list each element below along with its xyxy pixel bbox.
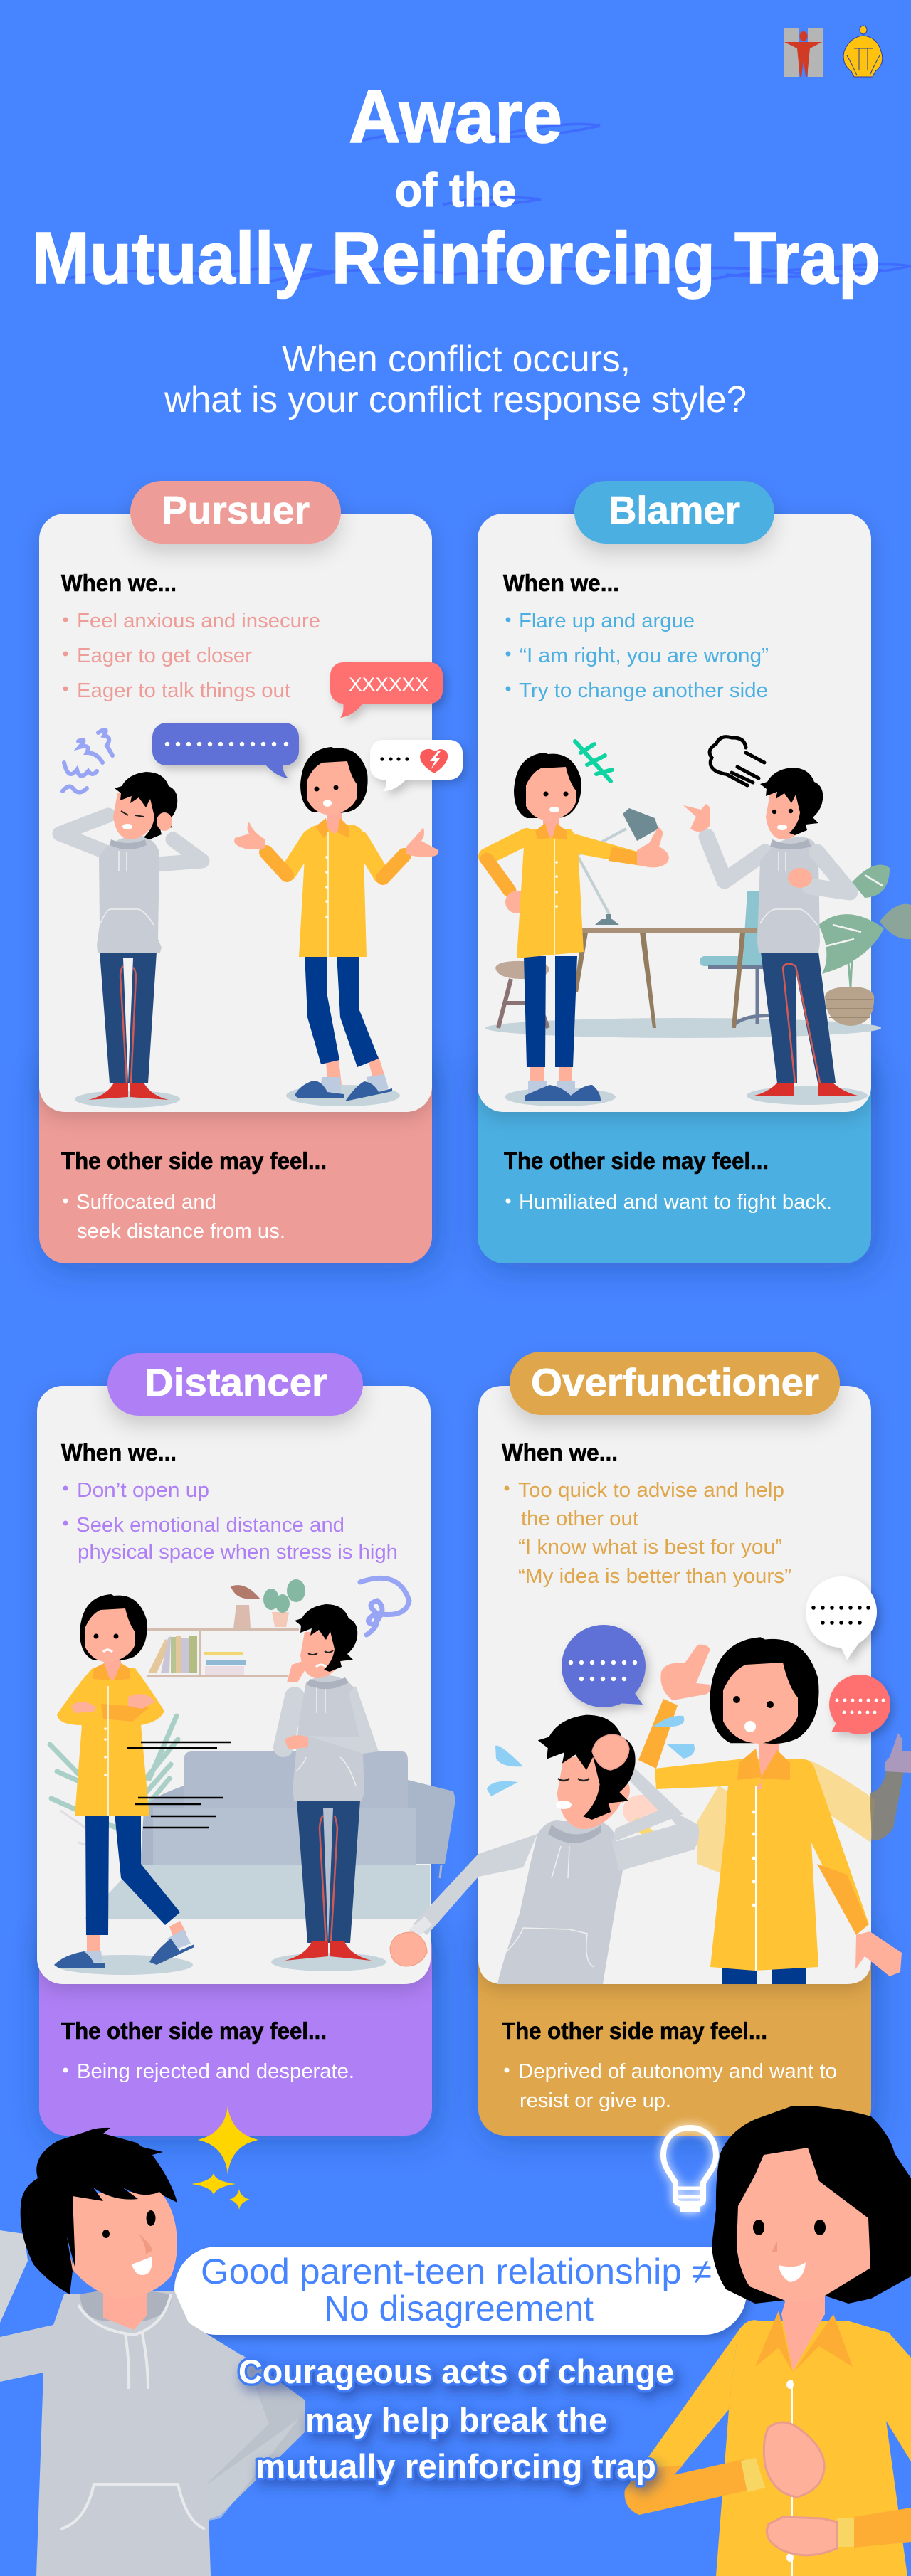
icon: light bulb [663, 2128, 716, 2212]
title scribbles [60, 124, 911, 283]
speech bubble: red XXXXXX [330, 662, 443, 718]
icon: hands logo [843, 26, 883, 77]
figure: boy pointing [683, 768, 868, 1105]
blamer feeling text: Humiliated and want to fight back. [519, 1191, 832, 1214]
pursuer feeling card [39, 1053, 432, 1263]
subtitle: what is your conflict response style? [164, 379, 747, 420]
figure: woman pointing [487, 753, 669, 1106]
overfunctioner behaviours: Too quick to advise and help [518, 1479, 784, 1502]
message text: No disagreement [324, 2289, 594, 2328]
overfunctioner feeling text: resist or give up. [520, 2089, 671, 2112]
blamer behaviours: “I am right, you are wrong” [520, 645, 769, 667]
call to action [238, 2353, 674, 2485]
subtitle: When conflict occurs, [282, 339, 631, 380]
woman hair [712, 2106, 911, 2304]
overfunctioner feeling text: Deprived of autonomy and want to [518, 2060, 837, 2083]
overfunctioner behaviours: When we... [502, 1439, 618, 1465]
furniture: room scene [485, 808, 911, 1038]
figure: woman with many gesturing arms [638, 1637, 911, 1984]
pursuer pill heading [130, 481, 341, 544]
icon: scribble swirl [360, 1578, 409, 1635]
icon: stars [191, 2106, 258, 2210]
panel: closing message [0, 2106, 911, 2576]
logos [784, 26, 883, 77]
woman face [737, 2148, 870, 2302]
title: Mutually Reinforcing Trap [32, 217, 880, 299]
blamer feeling card [478, 1053, 871, 1263]
title: of the [395, 164, 516, 216]
pursuer behaviours: Eager to get closer [77, 645, 252, 667]
speech bubble: red XXXXXX: XXXXXX [349, 674, 428, 695]
boy hair [21, 2128, 177, 2294]
figure: woman smiling [625, 2106, 911, 2576]
pursuer behaviours: When we... [61, 570, 177, 596]
icon: anger mark [575, 741, 612, 781]
distancer behaviours [61, 1439, 398, 1564]
call to action: mutually reinforcing trap [256, 2447, 656, 2485]
panel: pursuer [39, 481, 463, 1263]
pursuer behaviours: Feel anxious and insecure [77, 610, 320, 632]
figure: boy being advised [390, 1715, 699, 1984]
pursuer white card [39, 514, 432, 1112]
pursuer behaviours: Eager to talk things out [77, 679, 290, 702]
title [32, 75, 911, 299]
pursuer behaviours [61, 570, 320, 702]
boy ear [50, 2249, 73, 2286]
blamer behaviours: Flare up and argue [519, 610, 695, 632]
blamer feeling text [504, 1147, 832, 1214]
distancer pill heading [107, 1353, 363, 1416]
panel: distancer [37, 1353, 456, 2136]
pursuer feeling text [61, 1147, 327, 1243]
icon: sweat drops [487, 1716, 695, 1796]
distancer white card [37, 1386, 431, 1984]
boy face [73, 2190, 177, 2299]
distancer feeling text [61, 2018, 354, 2083]
figure: boy covering ears [60, 772, 202, 1108]
speed lines [127, 1742, 231, 1828]
overfunctioner behaviours: “I know what is best for you” [518, 1536, 782, 1559]
blamer pill heading: Blamer [609, 488, 740, 532]
figure: woman shrugging [234, 747, 438, 1106]
speech bubble: white with broken heart [370, 740, 463, 791]
pursuer feeling text: seek distance from us. [77, 1220, 285, 1243]
speech bubble: blue [152, 723, 299, 778]
message pill [174, 2247, 747, 2335]
figure: boy winking [0, 2128, 305, 2576]
message text [201, 2252, 712, 2328]
blamer behaviours: When we... [503, 570, 619, 596]
overfunctioner behaviours: “My idea is better than yours” [518, 1565, 791, 1588]
pursuer feeling text: The other side may feel... [61, 1147, 327, 1174]
panel: overfunctioner [390, 1352, 911, 2136]
subtitle [164, 339, 747, 420]
distancer feeling text: The other side may feel... [61, 2018, 327, 2044]
overfunctioner feeling card [478, 1921, 871, 2136]
furniture: shelf, sofa and plants [50, 1579, 456, 1919]
overfunctioner behaviours [502, 1439, 791, 1588]
figure: boy thinking [271, 1604, 386, 1971]
blamer feeling text: The other side may feel... [504, 1147, 769, 1174]
figure: woman walking away [54, 1594, 194, 1975]
distancer behaviours: physical space when stress is high [78, 1541, 398, 1564]
speech bubble: blue [562, 1625, 646, 1707]
speech bubble: white [806, 1576, 877, 1660]
icon: steam puff [710, 737, 764, 785]
blamer behaviours: Try to change another side [519, 679, 768, 702]
panel: blamer [478, 481, 911, 1263]
blamer behaviours [503, 570, 769, 702]
blamer white card [478, 514, 871, 1112]
distancer feeling text: Being rejected and desperate. [77, 2060, 354, 2083]
distancer behaviours: Seek emotional distance and [76, 1514, 344, 1537]
distancer feeling card [39, 1921, 432, 2136]
icon: health department logo [784, 28, 823, 77]
title: Aware [349, 75, 562, 159]
distancer behaviours: When we... [61, 1439, 177, 1465]
overfunctioner feeling text [502, 2018, 837, 2112]
blamer pill heading [574, 481, 774, 544]
distancer pill heading: Distancer [144, 1360, 327, 1404]
pursuer pill heading: Pursuer [162, 488, 310, 532]
overfunctioner pill heading [510, 1352, 840, 1415]
overfunctioner pill heading: Overfunctioner [531, 1360, 819, 1404]
message text: Good parent-teen relationship ≠ [201, 2252, 712, 2291]
overfunctioner behaviours: the other out [521, 1507, 638, 1530]
overfunctioner feeling text: The other side may feel... [502, 2018, 767, 2044]
call to action: may help break the [305, 2401, 607, 2439]
speech bubble: red [829, 1675, 890, 1734]
overfunctioner white card [478, 1386, 871, 1984]
call to action: Courageous acts of change [238, 2353, 674, 2390]
icon: stress squiggles [63, 730, 112, 793]
distancer behaviours: Don’t open up [77, 1479, 209, 1502]
pursuer feeling text: Suffocated and [76, 1191, 216, 1214]
